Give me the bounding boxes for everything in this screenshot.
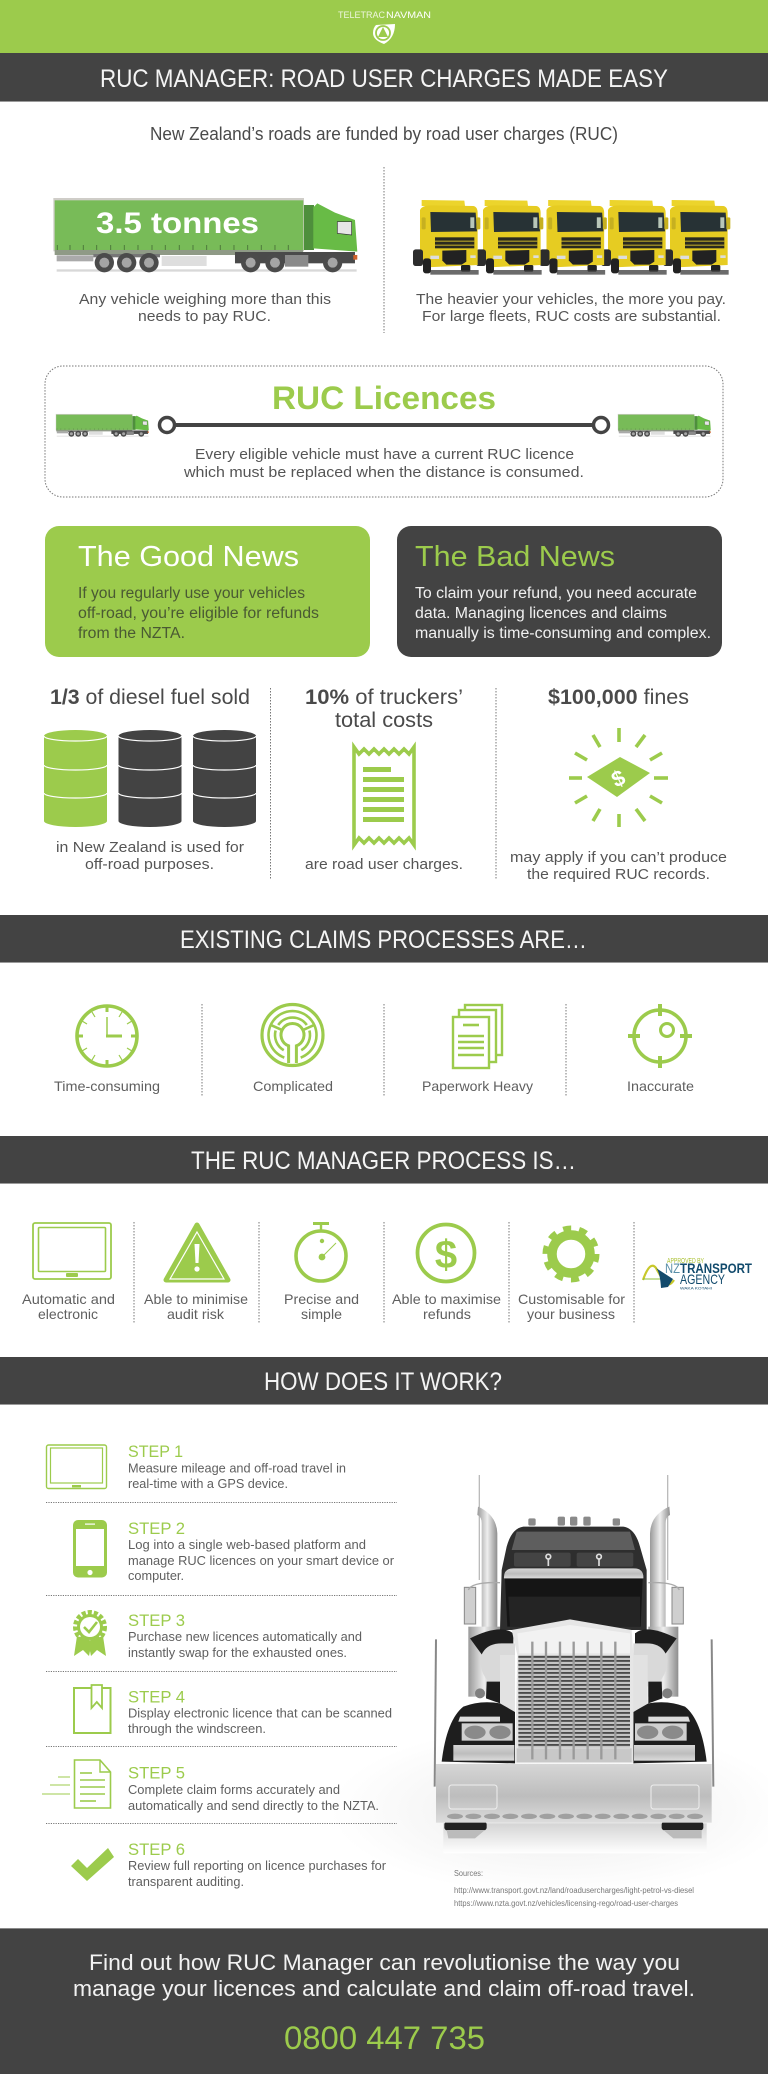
heading: STEP 4 [128,1688,185,1706]
caption [56,839,244,873]
icon: stack of papers [453,1005,502,1068]
text [128,1782,379,1813]
caption: the required RUC records. [527,866,710,883]
heading: 10% of truckers’ [305,686,463,709]
caption: off-road purposes. [85,856,214,873]
panel: the bad news: The Bad News [415,541,615,573]
stat: one third of diesel [44,686,256,873]
banner: how does it work [0,1357,768,1405]
caption: Any vehicle weighing more than this [79,291,331,308]
logo: NZ Transport Agency approval: TRANSPORT [680,1260,752,1276]
heading: STEP 5 [128,1764,185,1782]
caption: The heavier your vehicles, the more you pay. [416,291,726,308]
panel: the good news: from the NZTA. [78,625,185,642]
icon: dollar coin: $ [435,1233,457,1277]
logo: NZ Transport Agency approval [643,1258,752,1290]
banner: the RUC manager process [0,1136,768,1184]
caption: Able to maximise [392,1291,501,1307]
icon: rosette with tick [74,1612,106,1656]
heading: $100,000 fines [548,686,689,709]
caption: simple [301,1306,342,1322]
label: 3.5 tonnes: 3.5 tonnes [96,207,259,240]
text: Display electronic licence that can be scanned [128,1706,392,1720]
icon: start truck [56,414,149,437]
caption: Paperwork Heavy [422,1078,533,1094]
caption: Automatic and [22,1291,115,1307]
sources [454,1869,694,1908]
icon: stopwatch [296,1223,346,1281]
stat: ten percent of costs [305,686,463,873]
item: complicated [253,1004,333,1094]
icon: claim form sent [42,1760,110,1808]
item: precise and simple [284,1223,359,1322]
text: Log into a single web-based platform and [128,1537,366,1552]
panel: the bad news [397,526,722,657]
description [183,446,584,481]
sources: https://www.nzta.govt.nz/vehicles/licensing-rego/road-user-charges [454,1899,678,1908]
item: automatic and electronic [22,1223,115,1322]
logo: NZ Transport Agency approval: APPROVED BY [667,1258,704,1265]
stat: fines [510,686,727,883]
text [128,1858,387,1889]
step 2 [73,1519,395,1583]
panel: the bad news: To claim your refund, you need accurate [415,585,697,602]
sources: http://www.transport.govt.nz/land/roadusercharges/light-petrol-vs-diesel [454,1886,694,1895]
text: manage RUC licences on your smart device or [128,1553,395,1568]
panel: 3.5 tonne vehicle [53,198,357,325]
caption [392,1291,501,1322]
icon: licence with bookmark [74,1685,110,1733]
text [128,1629,362,1660]
caption [510,849,727,883]
text: computer. [128,1568,184,1583]
phone number: 0800 447 735 [284,2020,485,2056]
step 5 [42,1760,379,1813]
text [128,1460,346,1491]
heading: STEP 2 [128,1519,185,1538]
wordmark: Teletrac Navman [338,10,431,21]
text: instantly swap for the exhausted ones. [128,1645,347,1660]
icon: GPS tablet [46,1445,106,1488]
text [128,1537,395,1583]
heading [305,686,463,732]
top brand band [0,0,768,53]
step 6 [71,1840,387,1889]
caption: are road user charges. [305,856,463,873]
heading: STEP 6 [128,1840,185,1859]
caption [22,1291,115,1322]
caption: Precise and [284,1291,359,1307]
icon: tablet [33,1223,111,1279]
icon: tick [71,1848,114,1881]
icon: smartphone [73,1520,107,1578]
image: green truck [53,198,357,272]
item: maximise refunds [392,1224,501,1322]
item: minimise audit risk [144,1225,248,1322]
text: Purchase new licences automatically and [128,1629,362,1644]
caption: refunds [423,1306,471,1322]
logo: NZ Transport Agency approval: NZ [665,1260,680,1276]
call to action text: manage your licences and calculate and claim off-road travel. [73,1976,695,2001]
panel: the bad news: manually is time-consuming and complex. [415,625,711,642]
text: Review full reporting on licence purchases for [128,1858,387,1873]
call to action text: Find out how RUC Manager can revolutionise the way you [89,1950,680,1975]
caption [518,1291,625,1322]
text: automatically and send directly to the NZTA. [128,1798,379,1813]
logo: NZ Transport Agency approval: WAKA KOTAHI [680,1286,712,1290]
icon: green barrel [44,730,107,827]
panel: the good news: The Good News [78,541,299,573]
description: which must be replaced when the distance is consumed. [183,464,584,481]
caption: Able to minimise [144,1291,248,1307]
caption: audit risk [167,1306,225,1322]
panel: the good news: If you regularly use your vehicles [78,585,305,602]
caption: Time-consuming [54,1078,160,1094]
panel: fleets [413,200,730,325]
caption [284,1291,359,1322]
caption: electronic [38,1306,98,1322]
wordmark: Teletrac Navman: NAVMAN [386,10,431,21]
icon: warning triangle [166,1225,228,1280]
step 3 [74,1611,362,1660]
caption: Inaccurate [627,1078,694,1094]
heading: 1/3 of diesel fuel sold [50,686,250,709]
caption: Customisable for [518,1291,625,1307]
intro sentence: New Zealand’s roads are funded by road user charges (RUC) [150,124,618,144]
caption: For large fleets, RUC costs are substantial. [422,308,721,325]
banner: how does it work: HOW DOES IT WORK? [264,1368,502,1396]
caption: Complicated [253,1078,333,1094]
heading: STEP 3 [128,1611,185,1630]
caption: needs to pay RUC. [138,308,271,325]
caption: your business [527,1306,615,1322]
image: row of yellow trucks [413,200,730,275]
heading: STEP 1 [128,1442,183,1461]
title banner [0,53,768,102]
text [128,1706,392,1736]
panel: the bad news: data. Managing licences and claims [415,605,667,622]
text: Measure mileage and off-road travel in [128,1460,346,1476]
text: through the windscreen. [128,1721,266,1736]
item: customisable [518,1228,625,1322]
banner: existing claims [0,915,768,963]
step 1 [46,1442,346,1491]
panel: the good news [45,526,370,657]
caption [416,291,726,325]
icon: Teletrac Navman logo [373,24,395,44]
icon: maze [262,1004,323,1066]
banner: the RUC manager process: THE RUC MANAGER PROCESS IS… [191,1147,576,1175]
caption: in New Zealand is used for [56,839,244,856]
logo: NZ Transport Agency approval: AGENCY [680,1271,726,1287]
panel: the good news: off-road, you’re eligible for refunds [78,605,319,622]
icon: gear [546,1228,596,1280]
heading: total costs [335,709,433,732]
item: time-consuming [54,1005,160,1094]
wordmark: Teletrac Navman: TELETRAC [338,10,385,21]
background glow behind truck [330,1725,768,1895]
image: chrome truck front [435,1475,713,1853]
caption: may apply if you can’t produce [510,849,727,866]
banner: existing claims: EXISTING CLAIMS PROCESSES ARE… [180,926,587,954]
item: inaccurate [627,1004,694,1094]
text: transparent auditing. [128,1874,244,1889]
description: Every eligible vehicle must have a current RUC licence [195,446,574,463]
footer call to action [0,1928,768,2074]
icon: off-centre target [628,1004,692,1068]
sources: Sources: [454,1869,483,1878]
icon: dark barrel [193,730,256,827]
icon: dollar note with rays [569,728,668,827]
icon: dollar note with rays: $ [607,765,629,792]
call to action text [73,1950,695,2001]
icon: dark barrel [118,730,182,827]
text: Complete claim forms accurately and [128,1782,340,1797]
step 4 [74,1685,392,1736]
caption [144,1291,248,1322]
caption [79,291,331,325]
text: real-time with a GPS device. [128,1476,288,1491]
icon: end truck [618,414,711,437]
title banner: RUC MANAGER: ROAD USER CHARGES MADE EASY [100,65,668,93]
icon: clock [76,1005,138,1067]
item: paperwork heavy [422,1005,533,1094]
icon: receipt [354,747,414,845]
distance line [160,418,608,432]
panel: RUC licences [45,366,723,497]
heading: RUC Licences [272,380,496,416]
